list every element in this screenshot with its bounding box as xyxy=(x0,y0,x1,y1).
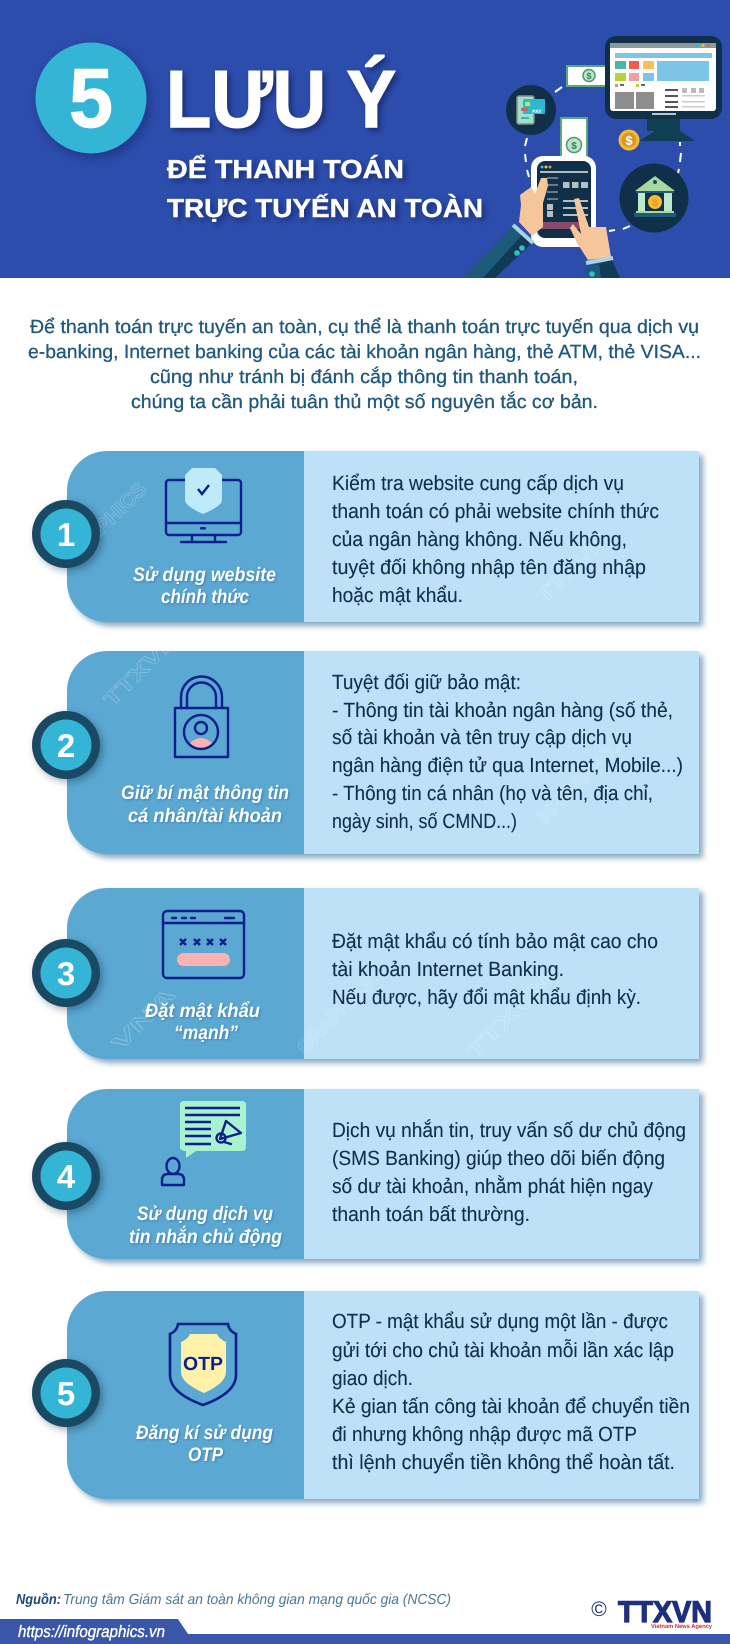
left hand and sleeve xyxy=(463,178,548,278)
text 5 xyxy=(332,1310,690,1474)
watermarks card 3 xyxy=(108,970,556,1064)
text 2 xyxy=(332,671,683,833)
watermarks card 2 xyxy=(100,629,633,829)
panel 3: strong password xyxy=(32,888,699,1064)
intro paragraph: cũng như tránh bị đánh cắp thông tin thanh toán, xyxy=(150,366,578,388)
dashed connectors xyxy=(525,87,681,231)
label 3 xyxy=(145,1000,260,1044)
label 5: OTP xyxy=(188,1444,224,1466)
label 4 xyxy=(129,1203,282,1248)
TTXVN logo: TTXVN xyxy=(618,1596,712,1629)
icon: padlock with user xyxy=(175,676,228,757)
number badge 4 xyxy=(32,1142,100,1210)
text 1: của ngân hàng không. Nếu không, xyxy=(332,528,627,551)
banknote top xyxy=(567,66,607,86)
footer bar xyxy=(0,1619,730,1644)
label 3: Đặt mật khẩu xyxy=(145,1000,260,1022)
bank circle: $ xyxy=(652,198,658,209)
text 1 xyxy=(332,472,659,607)
watermarks card 1 xyxy=(58,478,612,609)
icon: OTP shield: OTP xyxy=(183,1354,223,1375)
intro paragraph: chúng ta cần phải tuân thủ một số nguyên tắc cơ bản. xyxy=(131,391,598,413)
text 2: ngân hàng điện tử qua Internet, Mobile...) xyxy=(332,754,683,777)
watermarks card 3: TTXVN xyxy=(463,970,556,1064)
text 3: Nếu được, hãy đổi mật khẩu định kỳ. xyxy=(332,986,641,1009)
card 5 background xyxy=(67,1291,699,1499)
number badge 3: 3 xyxy=(57,955,75,992)
title: LƯU Ý xyxy=(166,55,396,145)
text 5: thì lệnh chuyển tiền không thể hoàn tất. xyxy=(332,1451,675,1474)
text 4: số dư tài khoản, nhằm phát hiện ngay xyxy=(332,1175,654,1198)
label 5 xyxy=(136,1422,273,1466)
footer bar: https://infographics.vn xyxy=(18,1623,165,1641)
intro paragraph: Để thanh toán trực tuyến an toàn, cụ thể là thanh toán trực tuyến qua dịch vụ xyxy=(30,317,699,338)
text 5: gửi tới cho chủ tài khoản mỗi lần xác lập xyxy=(332,1339,674,1362)
text 1: tuyệt đối không nhập tên đăng nhập xyxy=(332,556,646,579)
icon: OTP shield xyxy=(170,1324,236,1405)
text 4: (SMS Banking) giúp theo dõi biến động xyxy=(332,1147,665,1170)
text 4: Dịch vụ nhắn tin, truy vấn số dư chủ động xyxy=(332,1119,686,1142)
panel 2: keep information secret xyxy=(32,629,699,854)
number badge 5 xyxy=(32,1359,100,1427)
watermarks card 2: INFOGRAPHICS xyxy=(533,728,633,829)
watermarks card 3: GRAPHICS xyxy=(293,972,379,1059)
TTXVN logo: Vietnam News Agency xyxy=(651,1623,713,1630)
label 2: Giữ bí mật thông tin xyxy=(121,782,289,804)
pay phone circle xyxy=(506,85,556,135)
circle with number 5 xyxy=(36,42,146,154)
subtitle xyxy=(167,154,483,223)
label 4: tin nhắn chủ động xyxy=(129,1225,282,1248)
text 2: ngày sinh, số CMND...) xyxy=(332,810,517,833)
right hand and sleeve xyxy=(570,198,620,278)
label 2 xyxy=(121,782,289,827)
text 3 xyxy=(332,930,658,1009)
circle with number 5: 5 xyxy=(69,51,113,145)
text 2: số tài khoản và tên truy cập dịch vụ xyxy=(332,726,632,749)
text 2: - Thông tin cá nhân (họ và tên, địa chỉ, xyxy=(332,782,653,805)
source line: Nguồn: xyxy=(16,1592,61,1608)
text 4 xyxy=(332,1119,686,1226)
number badge 1 xyxy=(32,500,100,568)
intro paragraph xyxy=(28,317,701,413)
subtitle: TRỰC TUYẾN AN TOÀN xyxy=(167,193,483,223)
phone xyxy=(531,156,596,247)
icon: password window xyxy=(163,911,244,978)
watermarks card 3: VNA xyxy=(108,983,180,1056)
banknote top: $ xyxy=(586,71,592,81)
text 3: tài khoản Internet Banking. xyxy=(332,958,564,981)
watermarks card 1: GRAPHICS xyxy=(58,478,151,572)
coin xyxy=(618,130,640,150)
coin: $ xyxy=(625,133,633,148)
watermarks card 1: TTXVN xyxy=(533,529,612,609)
illustration: online payment xyxy=(463,36,722,278)
label 5: Đăng kí sử dụng xyxy=(136,1422,273,1444)
text 5: giao dịch. xyxy=(332,1367,413,1390)
watermarks card 2: TTXVN xyxy=(100,629,183,712)
text 3: Đặt mật khẩu có tính bảo mật cao cho xyxy=(332,930,658,953)
icon: monitor with shield xyxy=(166,468,241,542)
number badge 3 xyxy=(32,939,100,1007)
TTXVN logo: © xyxy=(591,1598,607,1621)
banknote vertical xyxy=(561,118,587,160)
label 2: cá nhân/tài khoản xyxy=(128,805,282,827)
number badge 5: 5 xyxy=(57,1375,75,1412)
label 3: “mạnh” xyxy=(174,1022,238,1044)
text 1: hoặc mật khẩu. xyxy=(332,584,463,607)
label 1 xyxy=(133,564,276,608)
text 5: Kẻ gian tấn công tài khoản để chuyển tiền xyxy=(332,1395,690,1418)
text 1: Kiểm tra website cung cấp dịch vụ xyxy=(332,472,624,495)
number badge 2 xyxy=(32,711,100,779)
text 1: thanh toán có phải website chính thức xyxy=(332,500,659,523)
monitor xyxy=(605,36,722,141)
label 1: Sử dụng website xyxy=(133,564,276,586)
text 5: OTP - mật khẩu sử dụng một lần - được xyxy=(332,1310,668,1333)
panel 5: OTP xyxy=(32,1291,699,1499)
card 1 background xyxy=(67,451,699,622)
number badge 1: 1 xyxy=(57,516,75,553)
panel 4: SMS banking xyxy=(32,1089,699,1259)
card 4 background xyxy=(67,1089,699,1259)
subtitle: ĐỂ THANH TOÁN xyxy=(167,154,404,184)
panel 1: use official website xyxy=(32,451,699,622)
text 4: thanh toán bất thường. xyxy=(332,1203,530,1226)
text 5: đi nhưng không nhập được mã OTP xyxy=(332,1423,637,1446)
bank circle xyxy=(620,164,688,232)
source line: Trung tâm Giám sát an toàn không gian mạng quốc gia (NCSC) xyxy=(63,1592,451,1608)
number badge 4: 4 xyxy=(57,1158,76,1195)
banknote vertical: $ xyxy=(571,141,577,152)
text 2: - Thông tin tài khoản ngân hàng (số thẻ, xyxy=(332,699,673,722)
pay phone circle: PAY xyxy=(532,109,542,115)
header banner xyxy=(0,0,730,278)
number badge 2: 2 xyxy=(57,727,75,764)
icon: message bubble and user xyxy=(162,1101,246,1185)
label 4: Sử dụng dịch vụ xyxy=(137,1203,273,1225)
card 2 background xyxy=(67,651,699,854)
label 1: chính thức xyxy=(161,586,249,608)
card 3 background xyxy=(67,888,699,1059)
intro paragraph: e-banking, Internet banking của các tài khoản ngân hàng, thẻ ATM, thẻ VISA... xyxy=(28,342,701,363)
text 2: Tuyệt đối giữ bảo mật: xyxy=(332,671,521,694)
